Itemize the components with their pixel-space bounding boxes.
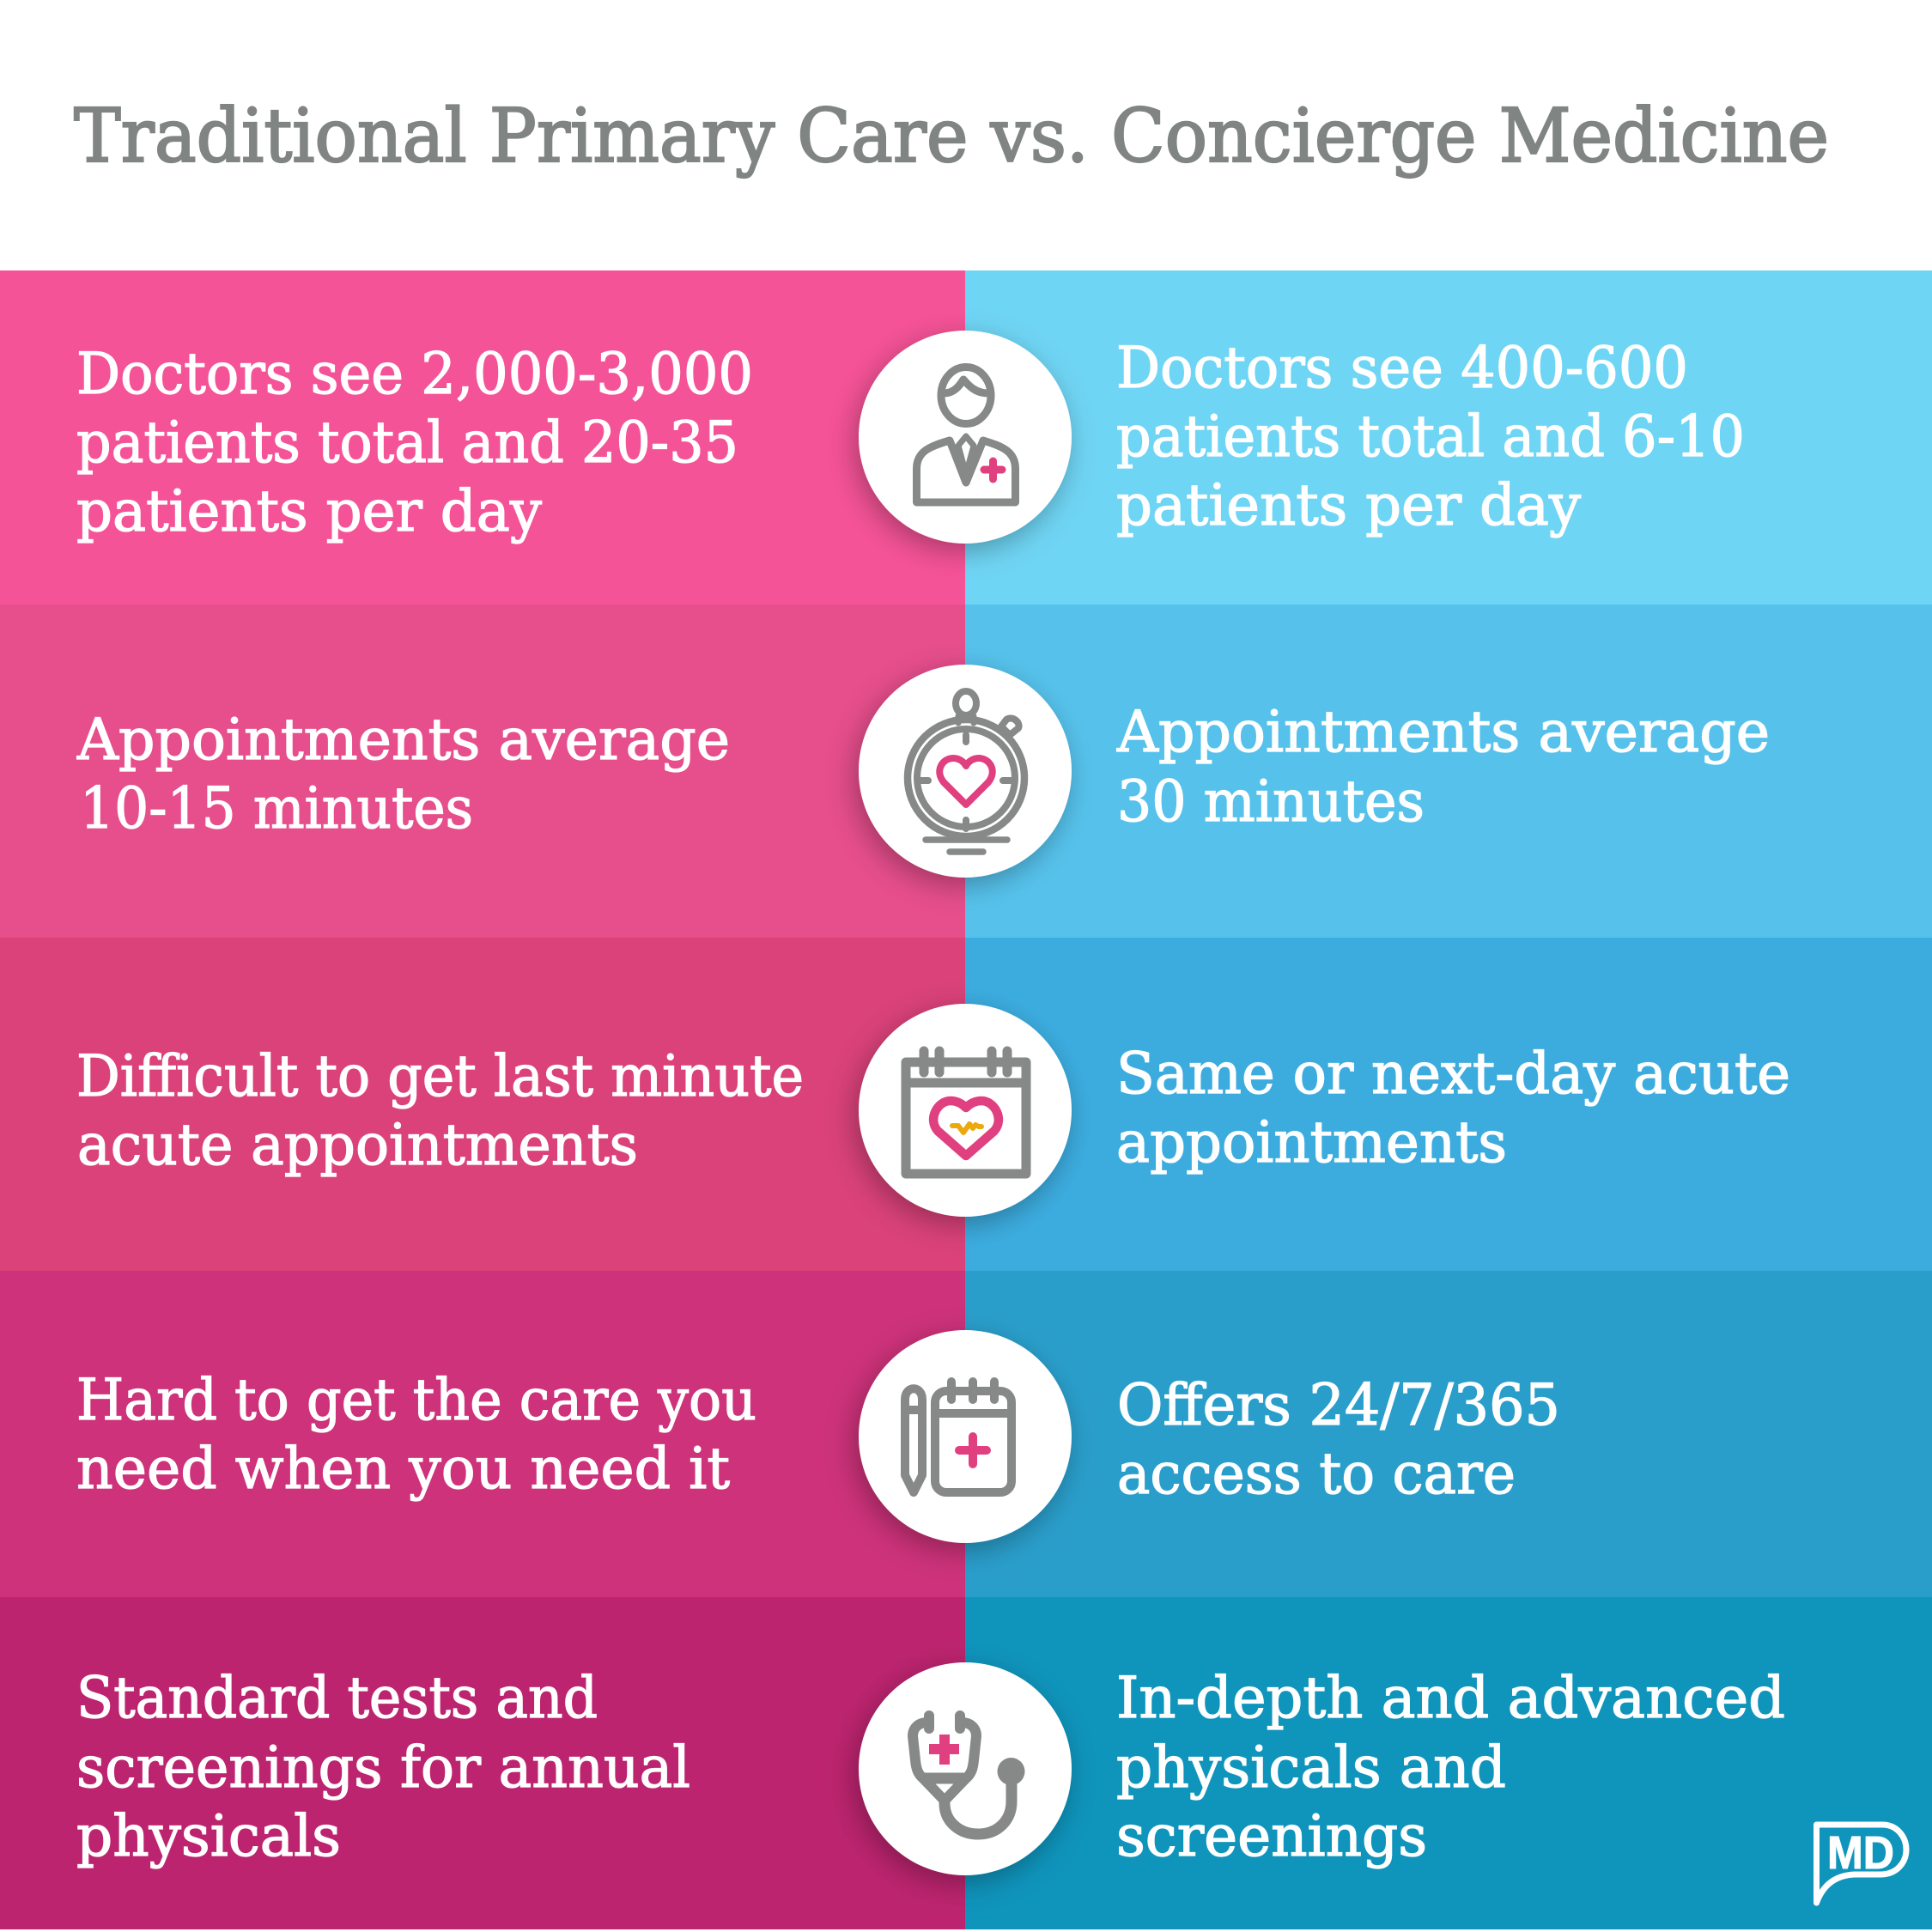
panel: row 4 concierge (965, 1271, 1932, 1597)
panel: row 5 traditional (0, 1597, 965, 1929)
panel: row 3 concierge (965, 938, 1932, 1271)
panel: row 1 traditional: Doctors see 2,000-3,000 (76, 341, 753, 407)
icon: stethoscope (859, 1662, 1072, 1875)
panel: row 4 traditional: Hard to get the care you (76, 1367, 756, 1433)
panel: row 2 concierge: Appointments average (1116, 699, 1770, 765)
panel: row 1 concierge: patients per day (1116, 472, 1582, 538)
icon: doctor (859, 331, 1072, 544)
panel: row 3 traditional: acute appointments (77, 1112, 638, 1178)
panel: row 5 concierge: screenings (1116, 1803, 1427, 1869)
panel: row 4 concierge: Offers 24/7/365 (1117, 1372, 1560, 1438)
icon: stopwatch with heart (859, 665, 1072, 878)
title: Traditional Primary Care vs. Concierge Medicine (74, 94, 1829, 179)
panel: row 1 concierge: patients total and 6-10 (1116, 404, 1745, 470)
icon: calendar with heart (859, 1004, 1072, 1217)
panel: row 5 concierge (965, 1597, 1932, 1929)
panel: row 4 concierge: access to care (1117, 1441, 1516, 1507)
panel: row 2 traditional (0, 605, 965, 938)
panel: row 2 concierge (965, 605, 1932, 938)
panel: row 2 traditional: 10-15 minutes (80, 775, 473, 841)
panel: row 5 traditional: Standard tests and (76, 1665, 598, 1731)
panel: row 1 traditional (0, 270, 965, 605)
panel: row 3 traditional (0, 938, 965, 1271)
panel: row 5 traditional: screenings for annual (76, 1735, 690, 1801)
panel: row 3 concierge: appointments (1116, 1109, 1507, 1176)
logo: MD speech bubble (1817, 1825, 1906, 1903)
logo: MD speech bubble: MD (1827, 1827, 1894, 1879)
panel: row 1 concierge (965, 270, 1932, 605)
panel: row 1 concierge: Doctors see 400-600 (1116, 335, 1688, 401)
panel: row 2 concierge: 30 minutes (1117, 769, 1425, 835)
panel: row 5 concierge: physicals and (1116, 1735, 1506, 1801)
icon: pencil and calendar (859, 1330, 1072, 1543)
panel: row 4 traditional (0, 1271, 965, 1597)
panel: row 1 traditional: patients per day (76, 478, 543, 544)
panel: row 3 concierge: Same or next-day acute (1116, 1041, 1790, 1107)
panel: row 1 traditional: patients total and 20-35 (76, 410, 738, 476)
panel: row 5 traditional: physicals (76, 1803, 341, 1869)
panel: row 5 concierge: In-depth and advanced (1116, 1665, 1785, 1731)
panel: row 2 traditional: Appointments average (76, 707, 730, 773)
panel: row 3 traditional: Difficult to get last minute (76, 1043, 804, 1109)
panel: row 4 traditional: need when you need it (76, 1436, 730, 1502)
